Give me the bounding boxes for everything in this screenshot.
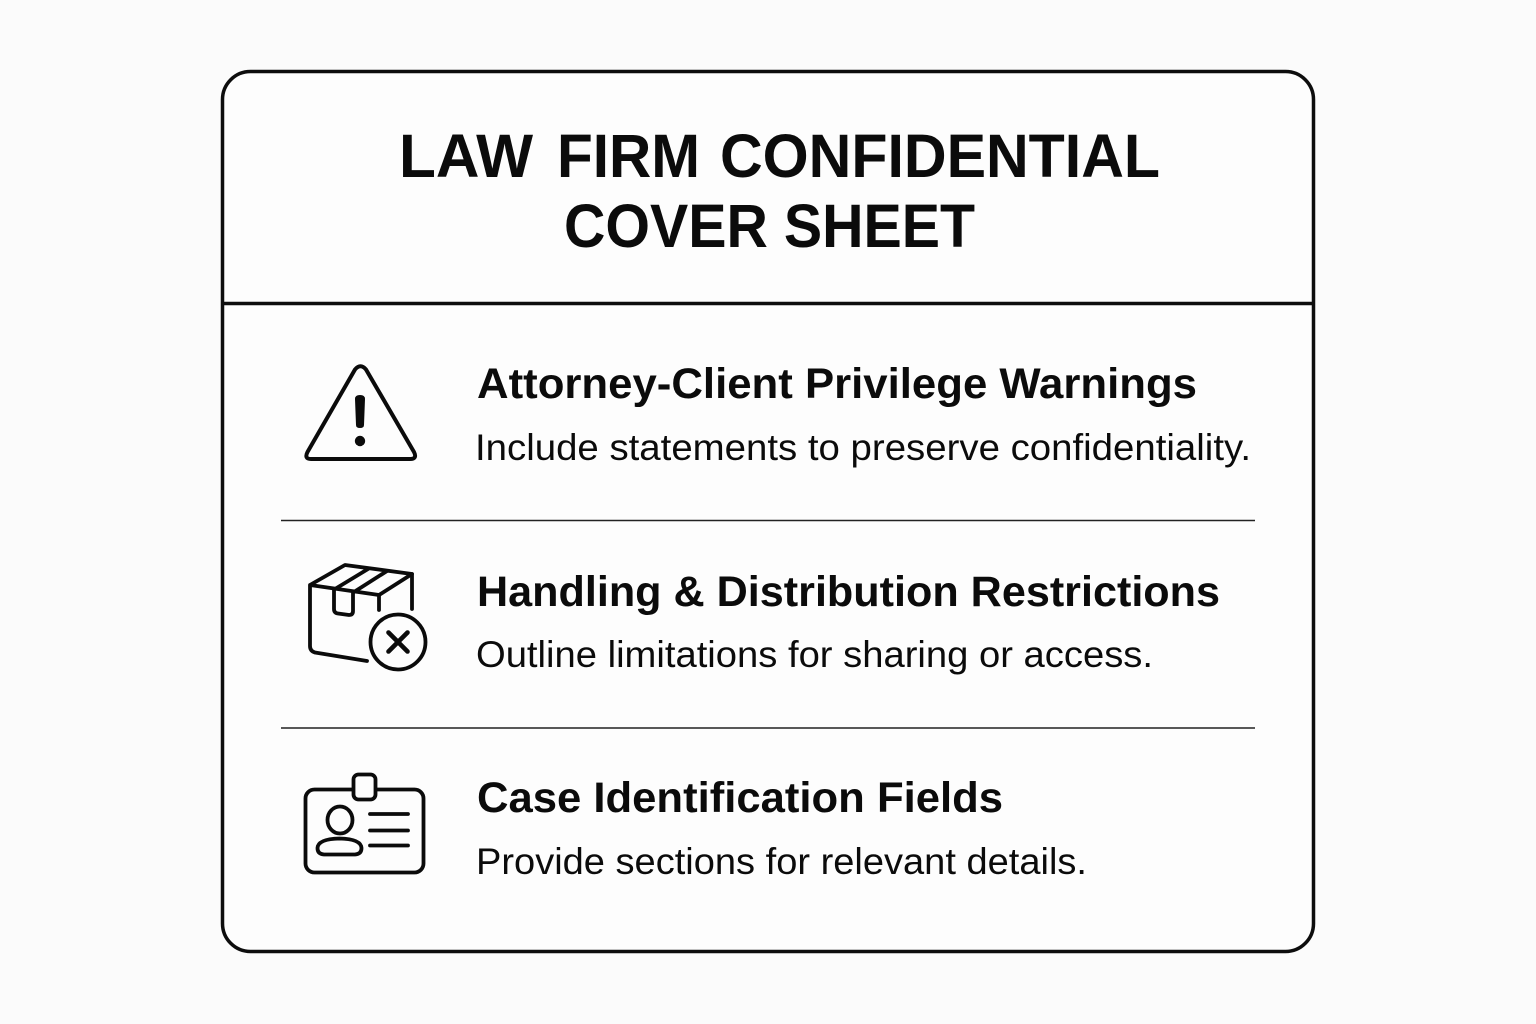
heading: case identification fields: Case Identification Fields (477, 774, 1003, 822)
icon: warning triangle (306, 366, 415, 459)
title (399, 122, 1160, 260)
section: attorney-client privilege warnings (306, 360, 1251, 468)
heading: handling and distribution restrictions: Handling & Distribution Restrictions (477, 568, 1220, 616)
title: LAW (399, 122, 533, 190)
title: FIRM (557, 122, 700, 190)
title: COVER SHEET (564, 192, 975, 260)
text: case fields description: Provide sections for relevant details. (476, 841, 1087, 882)
title: CONFIDENTIAL (720, 122, 1160, 190)
icon: package with x badge (310, 565, 426, 670)
panel: cover sheet card (222, 72, 1314, 952)
heading: attorney-client privilege warnings: Attorney-Client Privilege Warnings (477, 360, 1197, 408)
text: handling description: Outline limitations for sharing or access. (476, 634, 1153, 675)
icon: id badge (306, 774, 424, 872)
section: case identification fields (306, 774, 1087, 882)
text: privilege description: Include statements to preserve confidentiality. (475, 427, 1251, 468)
section: handling and distribution restrictions (310, 565, 1220, 675)
